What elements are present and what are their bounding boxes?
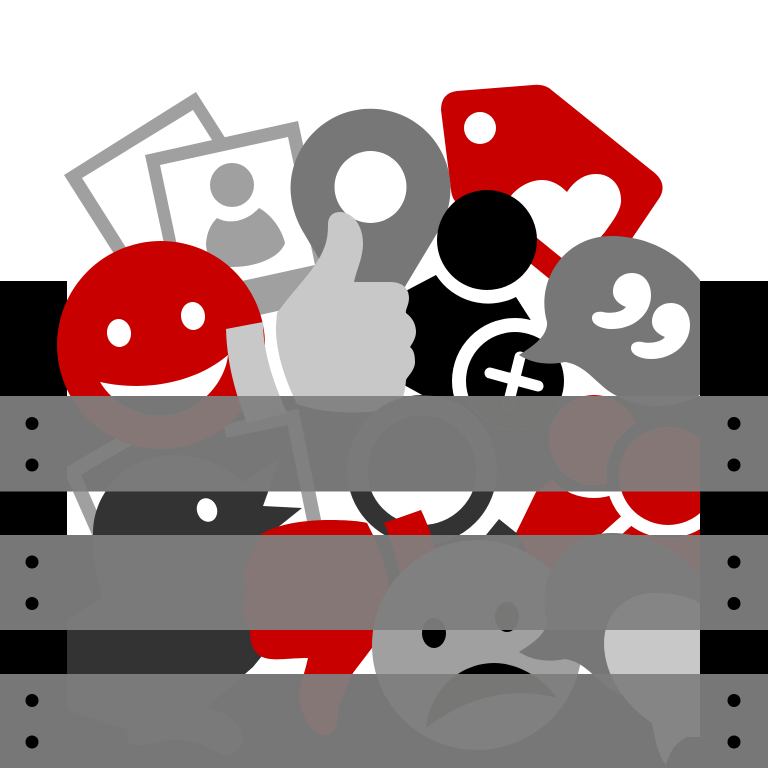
- icon: red thumbs down: [243, 510, 445, 735]
- icon: black person with plus badge: [395, 190, 578, 444]
- right crate post: [700, 281, 768, 768]
- crate planks: [0, 396, 768, 768]
- icon: red person with badge: [516, 395, 700, 575]
- icon: lower photo frames: [72, 417, 316, 540]
- icon: speech bubble with quote marks: [519, 236, 700, 406]
- icon: light speech bubble: [604, 593, 700, 765]
- icon: dark magnifier ring: [357, 405, 519, 560]
- plank rivets: [26, 417, 740, 748]
- icon: lower gray speech bubble: [519, 533, 698, 674]
- crate contents: [57, 85, 730, 765]
- left crate post: [0, 281, 67, 768]
- icon: red smiley: [57, 241, 265, 449]
- icon: dark speech bubble with body: [67, 492, 302, 674]
- icon: photo with person: [145, 121, 336, 332]
- icon: sad face: [372, 540, 582, 750]
- icon: red price tag with heart: [441, 85, 663, 308]
- icon: location pin: [290, 109, 450, 345]
- objects showing faintly through planks: [67, 396, 700, 764]
- icon: tilted back photo: [64, 92, 290, 323]
- icon: thumbs up: [226, 212, 416, 423]
